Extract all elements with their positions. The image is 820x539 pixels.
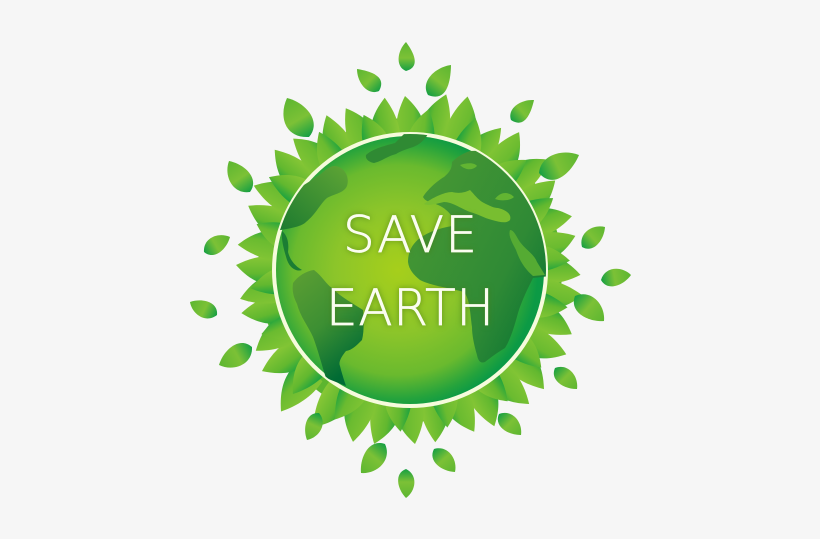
- title line: save: SAVE: [343, 206, 477, 264]
- save earth illustration: [190, 42, 631, 498]
- scattered falling leaves: [186, 42, 632, 498]
- leaf: left middle: [200, 229, 234, 259]
- continent: north america: [280, 166, 348, 230]
- sea: red sea strip: [509, 230, 545, 276]
- leaf: right lower: [568, 288, 611, 329]
- leaf crown around the globe: [236, 91, 584, 448]
- leaf: bottom left large: [353, 437, 393, 480]
- leaf: right middle: [600, 266, 632, 288]
- continent: central america: [282, 231, 302, 271]
- continent: south america: [293, 270, 364, 386]
- leaf: right upper: [576, 220, 610, 253]
- title line: earth: EARTH: [326, 279, 494, 337]
- globe ocean: [276, 136, 544, 404]
- leaf: top: [399, 42, 415, 71]
- leaf: bottom right: [493, 408, 527, 441]
- leaf: top left small: [351, 62, 386, 97]
- sea: black sea patch: [460, 163, 477, 169]
- leaf: left upper: [220, 155, 258, 198]
- sea: mediterranean band: [424, 190, 510, 222]
- leaf: upper right small: [506, 94, 540, 127]
- leaf: upper right large: [535, 145, 584, 185]
- back layer of crown leaves: [236, 91, 584, 448]
- continent: eurasia and africa: [408, 150, 560, 363]
- leaf: far left: [186, 295, 221, 323]
- front layer of crown leaves: [249, 108, 571, 432]
- title: [326, 206, 494, 337]
- leaf: bottom left small: [300, 410, 327, 443]
- continent: greenland: [366, 134, 428, 163]
- globe ring: [272, 132, 548, 408]
- leaf: lower right: [549, 362, 583, 395]
- sea: caspian patch: [495, 193, 514, 200]
- leaf: bottom right small: [428, 443, 462, 478]
- leaf: lower left: [214, 338, 257, 375]
- leaf: top right: [420, 59, 460, 102]
- continents: [270, 130, 560, 386]
- leaf: bottom: [398, 469, 414, 498]
- globe: [270, 130, 560, 408]
- leaf: upper left large: [274, 92, 320, 144]
